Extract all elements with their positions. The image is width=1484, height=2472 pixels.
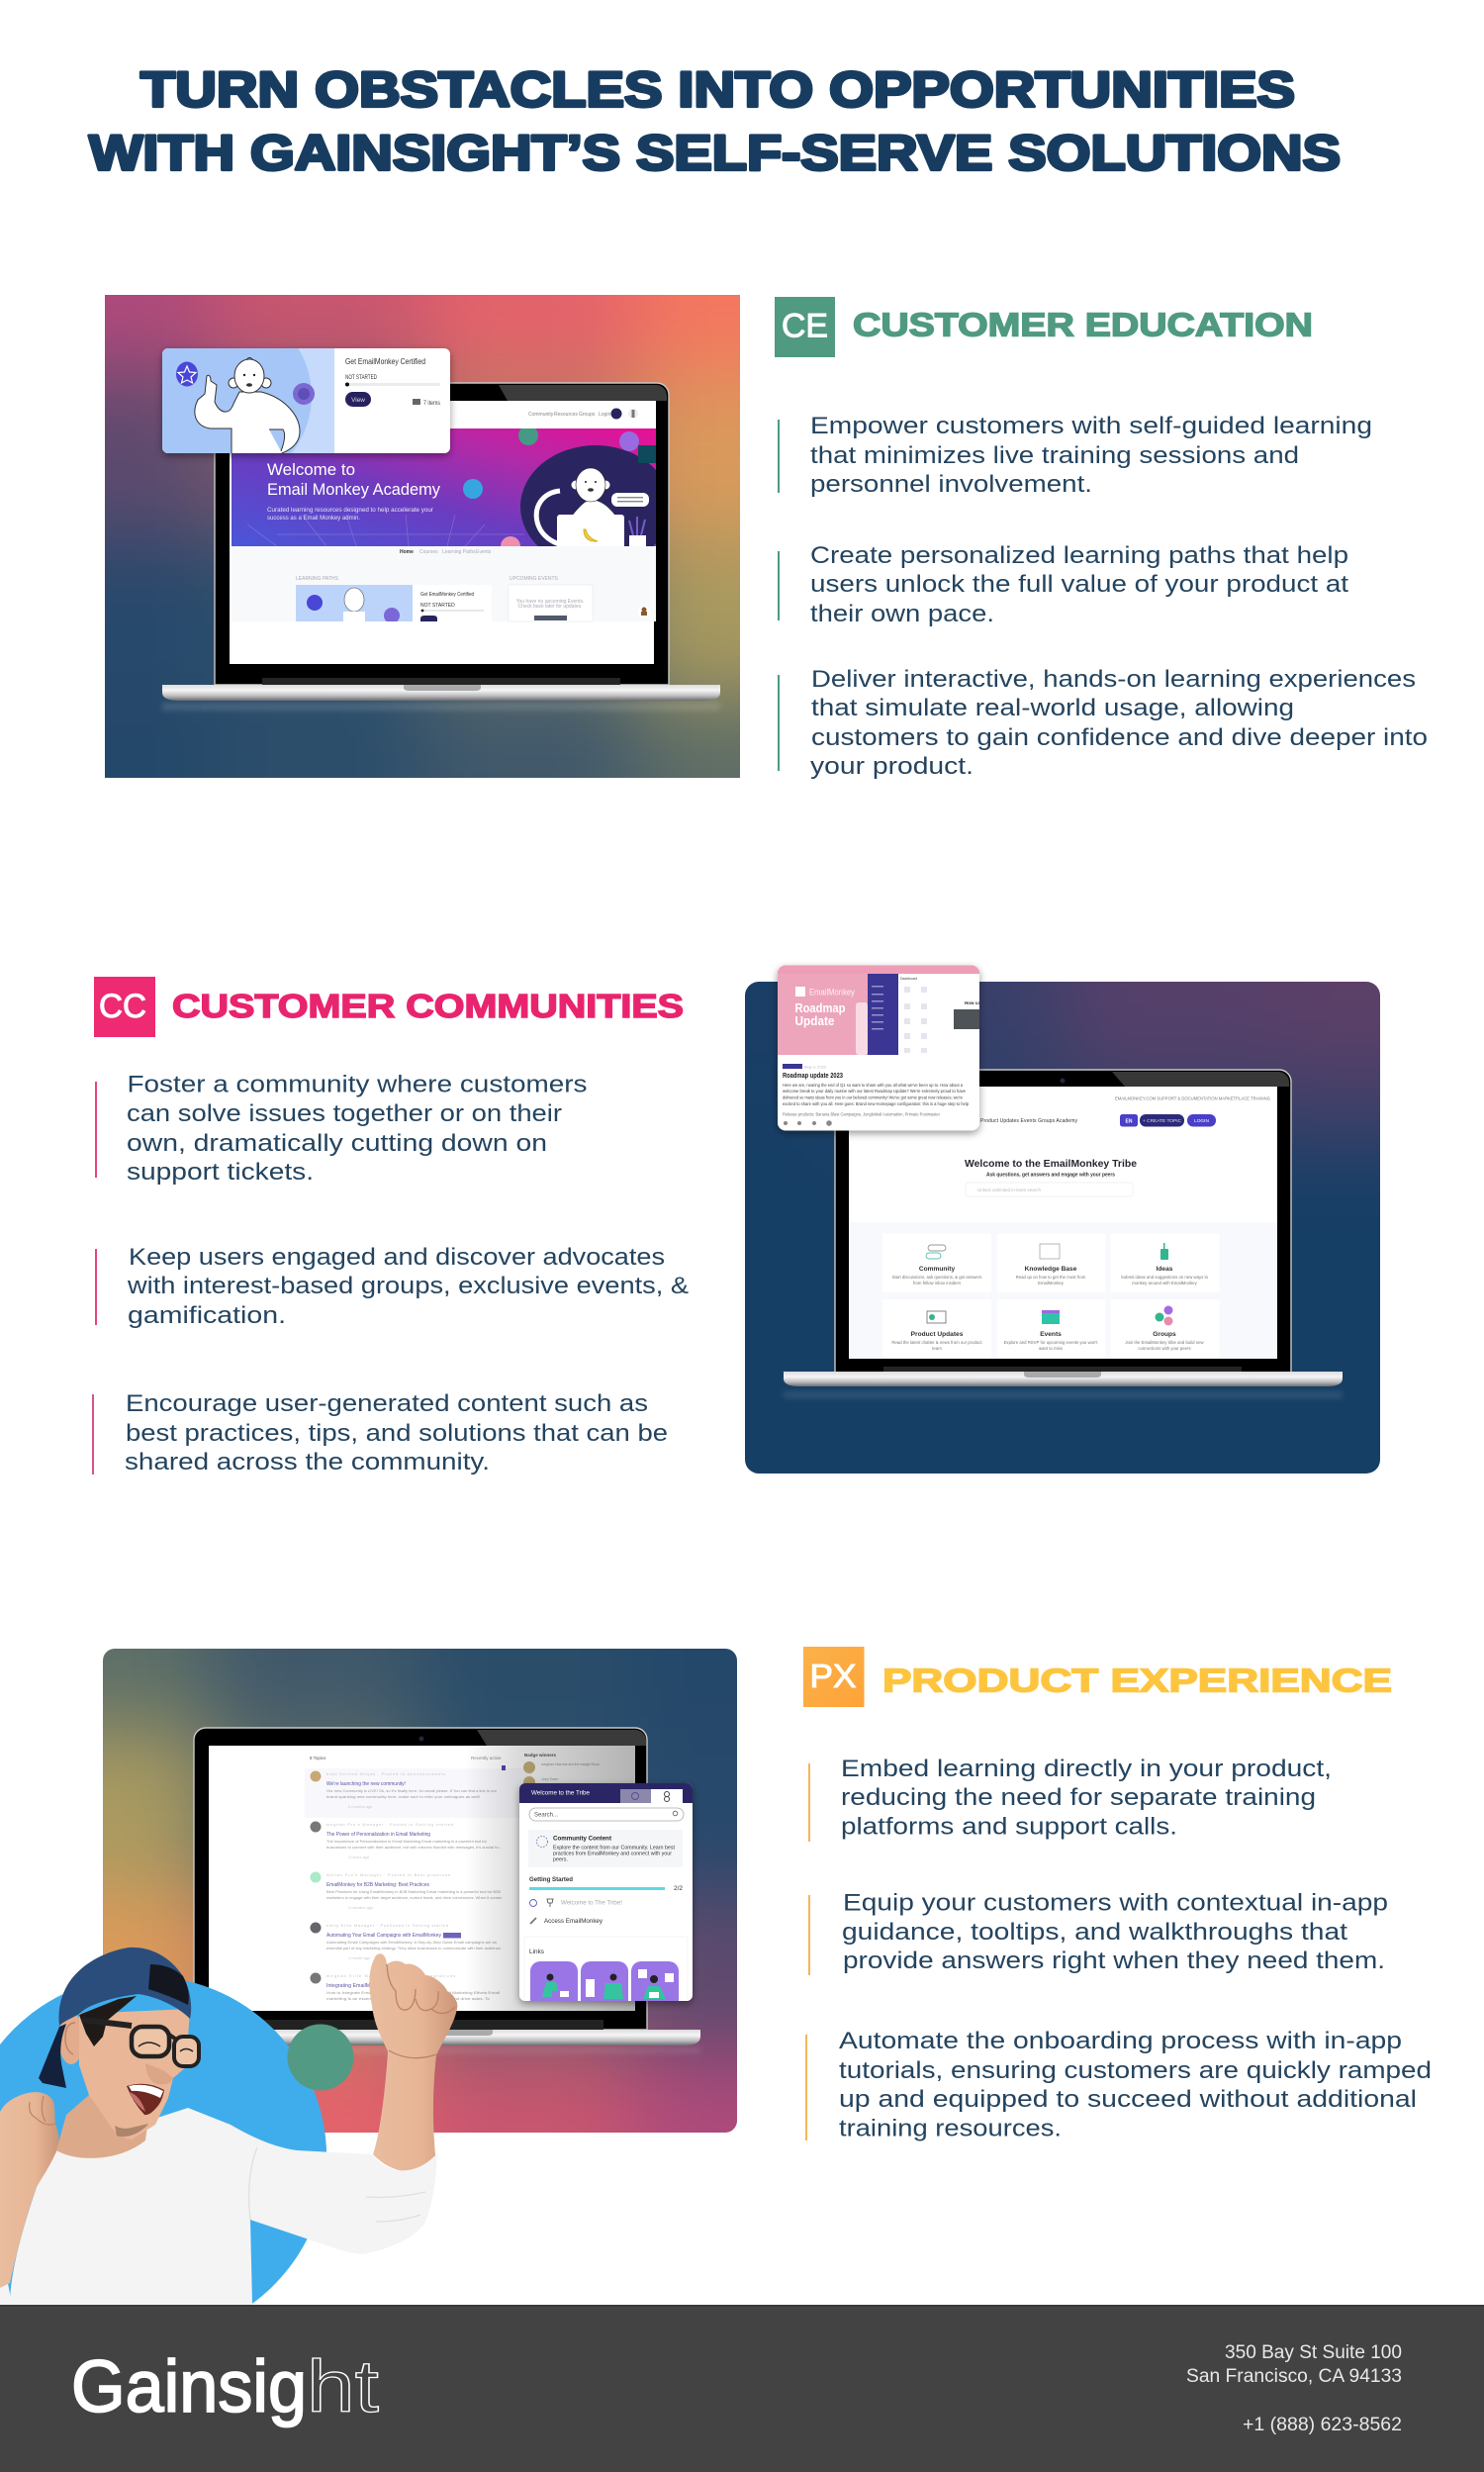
site navigation: + CREATE TOPIC [1143,1118,1182,1124]
point 3: your product. [810,753,974,780]
community content: Explore the content from our Community. Learn best [553,1845,676,1851]
community content: practices from EmailMonkey and connect with your [553,1851,672,1856]
getting started progress: Welcome to The Tribe! [561,1900,622,1906]
links: Links [529,1949,545,1955]
topic rows: 1 month ago [348,1955,371,1960]
point 3: training resources. [839,2116,1062,2141]
laptop: community topics [139,1728,700,2053]
hero copy: success as a Email Monkey admin. [267,515,360,522]
topic rows: Adrian Pro's Manager · Posted in Best practices [326,1872,450,1877]
site navigation: Product Updates Events Groups Academy [980,1118,1078,1124]
backwards cap [39,1948,191,2088]
contact address: San Francisco, CA 94133 [1186,2366,1402,2387]
point 2 [778,542,1348,627]
tabs [400,549,492,555]
gradient background [105,295,740,778]
community tiles: Ideas [1157,1266,1173,1273]
links [524,1937,688,2006]
point 1: personnel involvement. [810,471,1092,498]
card: welcome to the tribe [519,1783,693,2006]
heading: CUSTOMER EDUCATION [853,307,1313,344]
learning path preview: NOT STARTED [420,603,455,609]
card: roadmap update: EmailMonkey [809,988,855,998]
site navigation [528,408,638,420]
heading: CUSTOMER COMMUNITIES [172,989,684,1025]
heading: PRODUCT EXPERIENCE [882,1663,1392,1700]
community tiles: Product Updates [911,1331,964,1338]
point 1 [778,413,1372,498]
topic rows: EmailMonkey for B2B Marketing: Best Practices [326,1882,429,1888]
point 3 [92,1390,668,1475]
card: get certified: View [351,397,365,404]
community tiles: Explore and RSVP for upcoming events you won't [1004,1340,1098,1345]
point 2: Create personalized learning paths that help [810,542,1348,569]
white shirt [0,2108,437,2305]
topic rows: meghan Elite Manager · Posted in Integrations [326,1973,455,1978]
community tiles [882,1233,1219,1358]
badge: CC: CC [99,988,146,1025]
badge winners: Badge winners [524,1753,557,1758]
point 2: their own pace. [810,601,994,627]
topic rows: 3 minutes ago [348,1905,374,1910]
topic rows: Automating Your Email Campaigns with EmailMonkey [326,1933,441,1939]
card: welcome to the tribe: Search... [534,1813,558,1819]
card: get certified [158,346,455,461]
getting started progress: Access EmailMonkey [544,1919,603,1925]
gradient background [103,1649,737,2133]
contact address: 350 Bay St Suite 100 [1225,2342,1402,2363]
getting started progress: Getting Started [529,1876,573,1883]
card: get certified: NOT STARTED [345,375,378,381]
badge: CC [94,977,155,1037]
title [89,61,1341,180]
topic list: 8 Topics [310,1756,326,1760]
learning path preview: UPCOMING EVENTS [510,576,559,582]
panel: customer communities visual [745,963,1380,1474]
community tiles: monkey around with EmailMonkey [1132,1281,1198,1285]
point 3: customers to gain confidence and dive deeper into [811,724,1428,751]
getting started progress: 2/2 [674,1886,684,1892]
community tiles: Events [1040,1331,1062,1338]
point 3: shared across the community. [125,1449,490,1475]
point 1: support tickets. [127,1159,314,1186]
topic rows: How to Integrate EmailMonkey with your CRM Platform Email Marketing Efforts Email [326,1990,500,1995]
badge winners [523,1754,600,1783]
title: TURN OBSTACLES INTO OPPORTUNITIES [140,61,1295,117]
learning path preview [296,576,650,623]
badge: PX: PX [809,1658,857,1694]
point 3: Encourage user-generated content such as [126,1390,648,1417]
topic rows: Best Practices for Using EmailMonkey in B2B Marketing Email marketing is a powerful tool for B2B [326,1889,501,1894]
point 3: best practices, tips, and solutions that can be [126,1420,668,1447]
learning path preview: LEARNING PATHS [296,576,339,582]
gainsight logo: Gainsig [71,2345,307,2427]
hero copy [267,460,440,522]
site navigation: EN [1126,1118,1133,1124]
community welcome: Unlock unlimited in-team search [977,1188,1042,1192]
card: roadmap update: excited to share with you all. Here goes: Brand new Homepage configuration: this is a huge step to help [783,1101,970,1106]
card: roadmap update: Dashboard [900,977,917,981]
title: WITH GAINSIGHT’S SELF-SERVE SOLUTIONS [89,125,1341,180]
site navigation [980,1096,1270,1126]
community tiles: Join the EmailMonkey tribe and build new [1125,1340,1205,1345]
community tiles: Groups [1153,1331,1176,1338]
topic rows: brad Service Ninjas · Posted in Announcements [326,1771,445,1776]
community welcome: Ask questions, get answers and engage with your peers [986,1172,1115,1178]
point 2 [95,1244,689,1329]
site navigation: Community [528,412,554,418]
point 3: tutorials, ensuring customers are quickly ramped [839,2057,1432,2084]
point 1: that minimizes live training sessions and [810,442,1299,469]
badge: CE: CE [782,307,828,344]
point 1: platforms and support calls. [841,1813,1177,1841]
glasses [82,2020,199,2066]
site navigation: Resources [554,412,578,418]
community tiles: EmailMonkey [1038,1281,1065,1285]
community tiles: Community [919,1266,955,1273]
card: roadmap update: Update [795,1013,835,1028]
contact address [1186,2342,1402,2435]
card: roadmap update: delivered so many ideas from you in our beloved community! We've got some great new releases, we're [783,1094,964,1100]
footer [0,2305,1484,2472]
topic rows: The Power of Personalization in Email Marketing [326,1832,430,1838]
topic rows: marketing is an essential part of any strategy to nurture leads and drive sales. To [326,1996,491,2001]
card: welcome to the tribe: Welcome to the Tribe [531,1789,590,1797]
decorative green circle [287,2025,354,2090]
community welcome: Welcome to the EmailMonkey Tribe [965,1158,1137,1170]
point 2: with interest-based groups, exclusive events, & [127,1273,689,1299]
lowered arm and fist [0,2092,58,2288]
community welcome [965,1158,1137,1196]
topic rows: marketers to engage with their target audience, nurture leads, and drive conversions. When it comes [326,1895,502,1900]
getting started progress [529,1876,684,1925]
point 2: guidance, tooltips, and walkthroughs that [842,1919,1347,1946]
point 3: Deliver interactive, hands-on learning experiences [811,666,1416,693]
community tiles: from fellow inbox insiders [913,1281,961,1285]
monkey at laptop [536,468,649,548]
community tiles: team [932,1346,942,1351]
hair [79,1996,137,2046]
point 1: Foster a community where customers [127,1071,588,1098]
decorative blue circle [0,1976,326,2306]
topic rows: The Importance of Personalization in Email Marketing Email marketing is a powerful tool for [326,1839,488,1844]
community tiles: Start discussions, ask questions, & get answers [892,1275,981,1280]
badge winners: Joey Team [541,1777,558,1781]
topic rows [311,1771,502,2001]
point 1: own, dramatically cutting down on [127,1130,547,1157]
point 3: up and equipped to succeed without additional [839,2086,1417,2113]
tabs: Events [476,549,492,555]
learning path preview: Check back later for updates. [517,604,583,610]
community tiles: Read the latest chatter & news from our product [891,1340,982,1345]
tabs: Home [400,549,414,555]
topic rows: emily Elite Manager · Published in Getting started [326,1923,448,1928]
card: roadmap update: How can [965,1000,983,1005]
topic list: Recently active [471,1756,502,1760]
community content [528,1830,683,1867]
panel: customer education visual [105,295,740,778]
card: roadmap update: Roadmap update 2023 [783,1073,843,1080]
monkey mascot [195,358,300,457]
card: roadmap update: Roadmap [795,1000,846,1015]
point 3: that simulate real-world usage, allowing [811,695,1294,721]
community content: Community Content [553,1837,611,1843]
card: roadmap update [778,965,983,1130]
topic list [305,1746,635,2011]
point 3 [805,2028,1432,2141]
card: roadmap update: welcome break to your daily routine with our latest Roadmap Update? We're extremely proud to have [783,1089,967,1093]
point 1 [95,1071,588,1186]
topic rows: Automating Email Campaigns with EmailMonkey: A Step-by-Step Guide Email campaigns are an [326,1940,497,1945]
topic rows: businesses to connect with their audience, but with inboxes flooded with messages, it's crucial to... [326,1845,502,1850]
hero copy: Curated learning resources designed to help accelerate your [267,507,434,514]
section: product experience [803,1647,1432,2141]
hero copy: Welcome to [267,460,355,479]
laptop: academy site [162,383,720,711]
badge: PX [803,1647,865,1707]
learning path preview: You have no upcoming Events. [516,599,584,605]
point 1 [808,1756,1332,1842]
community tiles: Submit ideas and suggestions on new ways to [1121,1275,1209,1280]
contact address: +1 (888) 623-8562 [1243,2415,1402,2435]
card: get certified: 7 items [423,401,440,407]
community tiles: Read up on how to get the most from [1016,1275,1086,1280]
gainsight logo: ht [307,2345,380,2427]
point 2: gamification. [128,1302,286,1329]
topic rows: brand spanking new community here, make sure to refer your colleagues as well! [326,1794,480,1799]
section: customer education [775,297,1428,780]
card: get certified: Get EmailMonkey Certified [345,356,425,366]
point 1: can solve issues together or on their [127,1100,562,1127]
hero copy: Email Monkey Academy [267,480,440,499]
topic rows: essential part of any marketing strategy. They allow businesses to communicate with their audience. [326,1946,502,1950]
card: roadmap update: Release products: Banana Blast Campaigns, JungleMail Automation, Primate Postmaster [783,1112,941,1116]
card: roadmap update: Here we are, nearing the end of Q1 so want to share with you all what we've been up to. How about a [783,1083,964,1088]
head [58,1996,190,2139]
photo: cheering man [0,1948,457,2305]
point 1: Embed learning directly in your product, [841,1756,1332,1782]
section: customer communities [92,977,689,1475]
point 2: users unlock the full value of your product at [810,571,1348,598]
point 1: Empower customers with self-guided learning [810,413,1372,439]
learning path preview: Get EmailMonkey Certified [420,592,474,598]
tabs: Courses [419,549,438,555]
site navigation: Login [599,412,610,418]
tabs: Learning Paths [442,549,476,555]
topic rows: Our new Community is LIVE! Ok, so it's finally here. Un-email please. If You can find a link to our [326,1788,498,1793]
point 3: Automate the onboarding process with in-app [839,2028,1402,2054]
topic rows: We're launching the new community! [326,1781,406,1787]
point 2: Equip your customers with contextual in-app [843,1890,1388,1916]
topic rows: 6 months ago [348,1804,373,1809]
point 2: Keep users engaged and discover advocates [129,1244,665,1271]
point 3 [778,666,1428,780]
community tiles: Knowledge Base [1025,1266,1077,1273]
site navigation: LOGIN [1194,1118,1209,1124]
badge winners: meghan Has earned the badge Rock [541,1762,600,1766]
point 2: provide answers right when they need them. [843,1948,1385,1974]
topic rows: 2 hours ago [348,1854,370,1859]
hero banner [232,428,656,546]
topic rows: Integrating EmailMonkey with Your CRM Platform [326,1983,441,1989]
point 1: reducing the need for separate training [841,1784,1316,1811]
site navigation: Groups [579,412,596,418]
community tiles: want to miss [1039,1346,1063,1351]
community tiles: connections with your peers [1138,1346,1191,1351]
neck [56,2095,148,2158]
community content: peers. [553,1856,568,1862]
laptop: tribe community site [784,1070,1343,1398]
site navigation: EMAILMONKEY.COM SUPPORT & DOCUMENTATION MARKETPLACE TRAINING [1115,1096,1270,1100]
raised arm and fist [369,1953,457,2172]
point 2 [808,1890,1388,1975]
mouth [127,2084,164,2115]
topic rows: meghan Pro's Manager · Posted in Getting started [326,1822,453,1827]
panel: product experience visual [103,1649,737,2133]
badge: CE [775,297,835,357]
card: roadmap update: May 3, 2023 [804,1065,827,1069]
gradient background [745,982,1380,1474]
